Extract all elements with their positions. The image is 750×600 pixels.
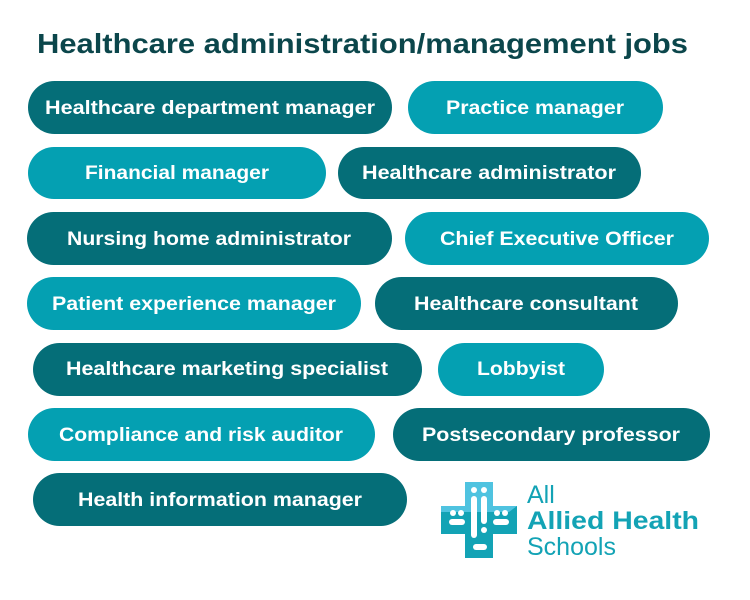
title: Healthcare administration/management jobs [37,28,688,59]
pill: Postsecondary professor: Postsecondary professor [422,425,681,446]
pill: Patient experience manager [27,277,361,330]
logo [441,481,699,561]
pill: Healthcare department manager [28,81,392,134]
logo: Schools [527,533,616,561]
pill: Nursing home administrator [27,212,392,265]
pill: Lobbyist [438,343,604,396]
pill: Compliance and risk auditor [28,408,375,461]
pill: Chief Executive Officer [405,212,709,265]
pill: Financial manager [28,147,326,199]
pill: Financial manager: Financial manager [85,163,270,184]
pill: Practice manager [408,81,663,134]
pill: Patient experience manager: Patient experience manager [52,294,337,315]
pill: Nursing home administrator: Nursing home administrator [67,229,352,250]
logo: Allied Health [527,507,699,535]
pill: Healthcare administrator [338,147,641,199]
pill: Healthcare marketing specialist: Healthcare marketing specialist [66,359,389,380]
logo text: All [527,481,555,509]
pill: Compliance and risk auditor: Compliance and risk auditor [59,425,344,446]
pill: Practice manager: Practice manager [446,98,625,119]
pill: Health information manager [33,473,407,526]
pill: Healthcare consultant [375,277,678,330]
pill: Healthcare consultant: Healthcare consultant [414,294,639,315]
pill: Healthcare department manager: Healthcare department manager [45,98,376,119]
pill: Healthcare administrator: Healthcare administrator [362,163,617,184]
pill: Chief Executive Officer: Chief Executive Officer [440,229,675,250]
pill: Postsecondary professor [393,408,710,461]
pill: Healthcare marketing specialist [33,343,422,396]
pill: Health information manager: Health information manager [78,490,363,511]
icon: cross [441,482,517,558]
pill: Lobbyist: Lobbyist [477,359,566,380]
